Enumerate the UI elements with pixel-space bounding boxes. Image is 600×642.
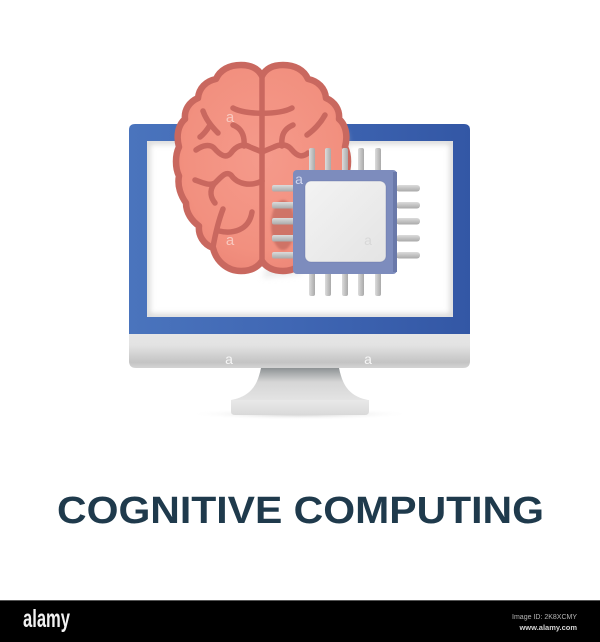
chip right pins — [396, 185, 420, 258]
icon: microchip: a — [364, 232, 372, 248]
watermark letters on monitor — [225, 351, 372, 367]
watermark letters on monitor: a — [225, 351, 233, 367]
icon: desktop monitor — [129, 124, 470, 420]
chip bottom pins — [309, 272, 381, 296]
chip body — [293, 170, 397, 274]
icon: brain — [176, 65, 350, 278]
monitor chin — [129, 330, 470, 368]
stand shadow — [188, 408, 412, 420]
brain outline — [176, 65, 348, 271]
chip top pins — [309, 148, 381, 172]
monitor screen — [147, 141, 453, 317]
brain folds — [195, 78, 325, 262]
monitor blue frame — [129, 124, 470, 334]
chip core — [305, 181, 386, 262]
brain shadow — [262, 130, 350, 278]
watermark letters on brain: a — [226, 109, 235, 126]
image id: Image ID: 2K8XCMY — [512, 614, 577, 621]
title: COGNITIVE COMPUTING — [57, 490, 544, 532]
chip left pins — [272, 185, 295, 258]
monitor stand — [231, 368, 368, 415]
alamy logo: alamy — [23, 605, 70, 633]
website: www.alamy.com — [518, 623, 577, 632]
footer bar — [0, 600, 600, 642]
stand base — [231, 400, 369, 415]
watermark letters on chip: a — [295, 171, 303, 187]
watermark letters on monitor: a — [364, 351, 372, 367]
icon: brain: a — [226, 232, 235, 249]
icon: microchip — [271, 148, 420, 296]
chip shadow on brain — [271, 200, 295, 250]
